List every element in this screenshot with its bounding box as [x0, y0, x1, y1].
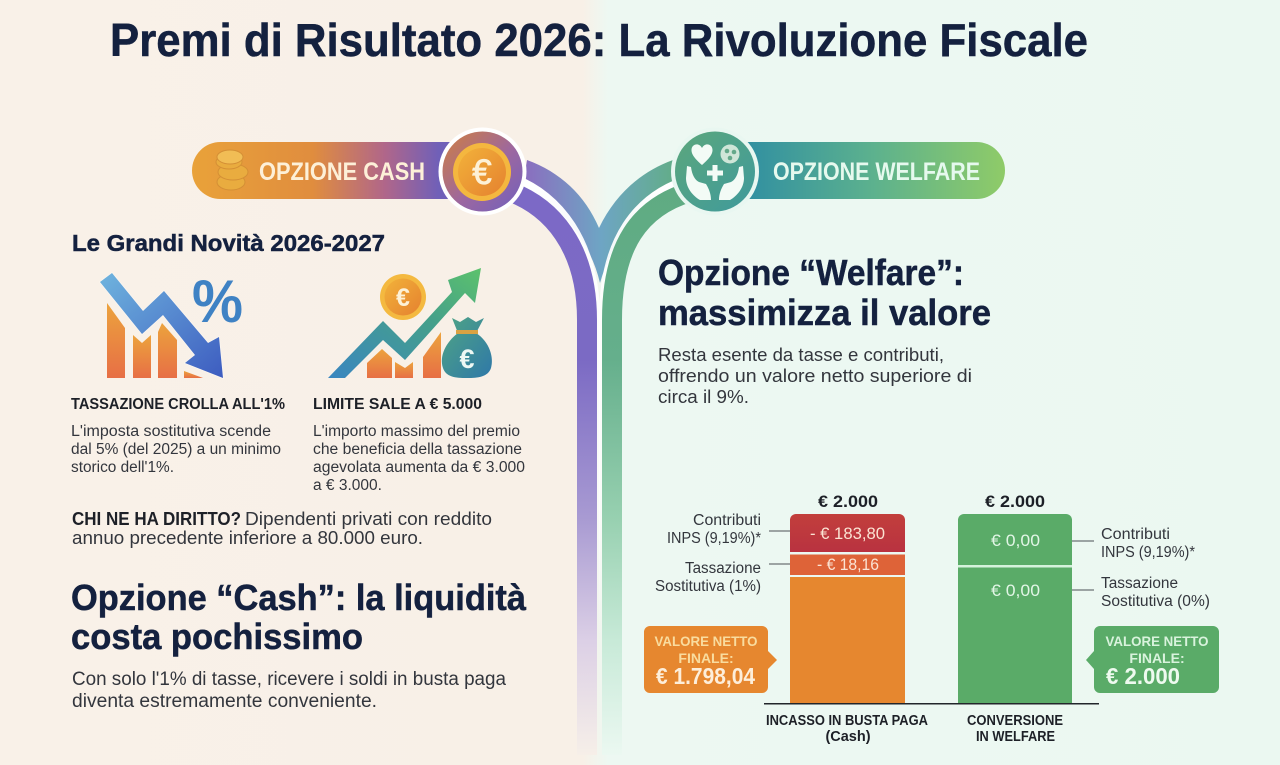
leader lines — [769, 531, 1094, 590]
callout: cash net value: VALORE NETTO — [654, 633, 758, 649]
heading: le grandi novità: Le Grandi Novità 2026-2027 — [72, 230, 385, 256]
text block: limite: LIMITE SALE A € 5.000 — [313, 396, 482, 413]
icon: money bag: € — [459, 344, 475, 374]
labels: cash deductions — [655, 512, 761, 595]
axis label: cash: (Cash) — [825, 729, 871, 745]
bar: welfare: € 0,00 — [991, 581, 1040, 600]
labels: cash deductions: Contributi — [693, 512, 761, 529]
heading: opzione cash: costa pochissimo — [71, 616, 363, 657]
text block: tassazione — [71, 396, 285, 476]
central branching arcs — [511, 160, 692, 755]
icon: plus — [707, 165, 723, 181]
bar: welfare: € 0,00 — [991, 531, 1040, 550]
callout: cash net value — [644, 626, 777, 693]
text block: chi ne ha diritto — [72, 508, 492, 548]
text block: tassazione: storico dell'1%. — [71, 459, 174, 476]
icon: rising limit chart — [328, 268, 492, 378]
text block: welfare description: circa il 9%. — [658, 386, 749, 407]
text block: chi ne ha diritto: annuo precedente inferiore a 80.000 euro. — [72, 527, 423, 548]
pill: opzione cash — [192, 142, 482, 199]
pill: opzione welfare — [720, 142, 1005, 199]
text block: welfare description: offrendo un valore netto superiore di — [658, 365, 972, 386]
text block: limite: L'importo massimo del premio — [313, 423, 520, 440]
labels: cash deductions: INPS (9,19%)* — [667, 530, 761, 547]
text block: cash description: Con solo l'1% di tasse, ricevere i soldi in busta paga — [72, 669, 506, 690]
labels: welfare deductions: INPS (9,19%)* — [1101, 544, 1195, 561]
chart: stacked bars comparison — [644, 492, 1219, 745]
icon: money bag — [442, 317, 492, 378]
heading: opzione cash: Opzione “Cash”: la liquidità — [71, 577, 527, 618]
axis label: welfare — [967, 713, 1063, 745]
axis label: cash: INCASSO IN BUSTA PAGA — [766, 713, 928, 729]
labels: welfare deductions: Sostitutiva (0%) — [1101, 593, 1210, 610]
text block: welfare description — [658, 344, 972, 407]
title: Premi di Risultato 2026: La Rivoluzione Fiscale — [110, 14, 1088, 66]
bar: welfare — [958, 492, 1072, 703]
axis label: welfare: IN WELFARE — [976, 729, 1055, 745]
text block: tassazione: L'imposta sostitutiva scende — [71, 423, 271, 440]
icon: gold coin — [380, 274, 426, 320]
icon: heart — [692, 144, 712, 165]
icon: flower — [720, 144, 740, 164]
labels: welfare deductions: Tassazione — [1101, 575, 1178, 592]
text block: chi ne ha diritto: CHI NE HA DIRITTO? — [72, 508, 241, 529]
text block: cash description — [72, 669, 506, 712]
text block: limite: agevolata aumenta da € 3.000 — [313, 459, 525, 476]
icon: coin stack — [216, 150, 248, 190]
text block: chi ne ha diritto: Dipendenti privati con reddito — [245, 508, 492, 529]
callout: welfare net value: FINALE: — [1129, 650, 1185, 666]
baseline axis — [764, 703, 1099, 704]
labels: welfare deductions: Contributi — [1101, 526, 1170, 543]
icon: hands — [686, 166, 744, 200]
text block: welfare description: Resta esente da tasse e contributi, — [658, 344, 944, 365]
callout: cash net value: € 1.798,04 — [656, 663, 755, 689]
icon: falling taxation chart — [100, 268, 243, 378]
bar: cash: - € 183,80 — [810, 524, 885, 543]
axis label: cash — [766, 713, 928, 745]
pill: opzione cash: OPZIONE CASH — [259, 158, 425, 186]
pill: opzione welfare: OPZIONE WELFARE — [773, 158, 980, 186]
heading: opzione welfare: Opzione “Welfare”: — [658, 252, 964, 293]
icon: gold coin: € — [396, 284, 410, 312]
callout: welfare net value — [1086, 626, 1219, 693]
icon: euro coin badge — [438, 128, 526, 216]
text block: limite — [313, 396, 525, 494]
icon: euro coin badge: € — [472, 153, 492, 192]
heading: opzione cash — [71, 577, 527, 657]
callout: welfare net value: VALORE NETTO — [1106, 633, 1209, 649]
bar: cash — [790, 492, 905, 703]
bar: cash: - € 18,16 — [817, 555, 879, 574]
callout: welfare net value: € 2.000 — [1106, 663, 1180, 689]
heading: opzione welfare — [658, 252, 991, 333]
text block: tassazione: dal 5% (del 2025) a un minimo — [71, 441, 281, 458]
labels: cash deductions: Sostitutiva (1%) — [655, 578, 761, 595]
labels: cash deductions: Tassazione — [685, 560, 761, 577]
text block: limite: che beneficia della tassazione — [313, 441, 522, 458]
bar: cash: € 2.000 — [818, 492, 878, 511]
callout: cash net value: FINALE: — [678, 650, 734, 666]
labels: welfare deductions — [1101, 526, 1210, 610]
text block: tassazione: TASSAZIONE CROLLA ALL'1% — [71, 396, 285, 413]
icon: hands with heart and plus — [671, 128, 759, 216]
heading: opzione welfare: massimizza il valore — [658, 292, 991, 333]
axis label: welfare: CONVERSIONE — [967, 713, 1063, 729]
icon: falling taxation chart: % — [192, 268, 243, 335]
text block: cash description: diventa estremamente conveniente. — [72, 691, 377, 712]
text block: limite: a € 3.000. — [313, 477, 382, 494]
bar: welfare: € 2.000 — [985, 492, 1045, 511]
